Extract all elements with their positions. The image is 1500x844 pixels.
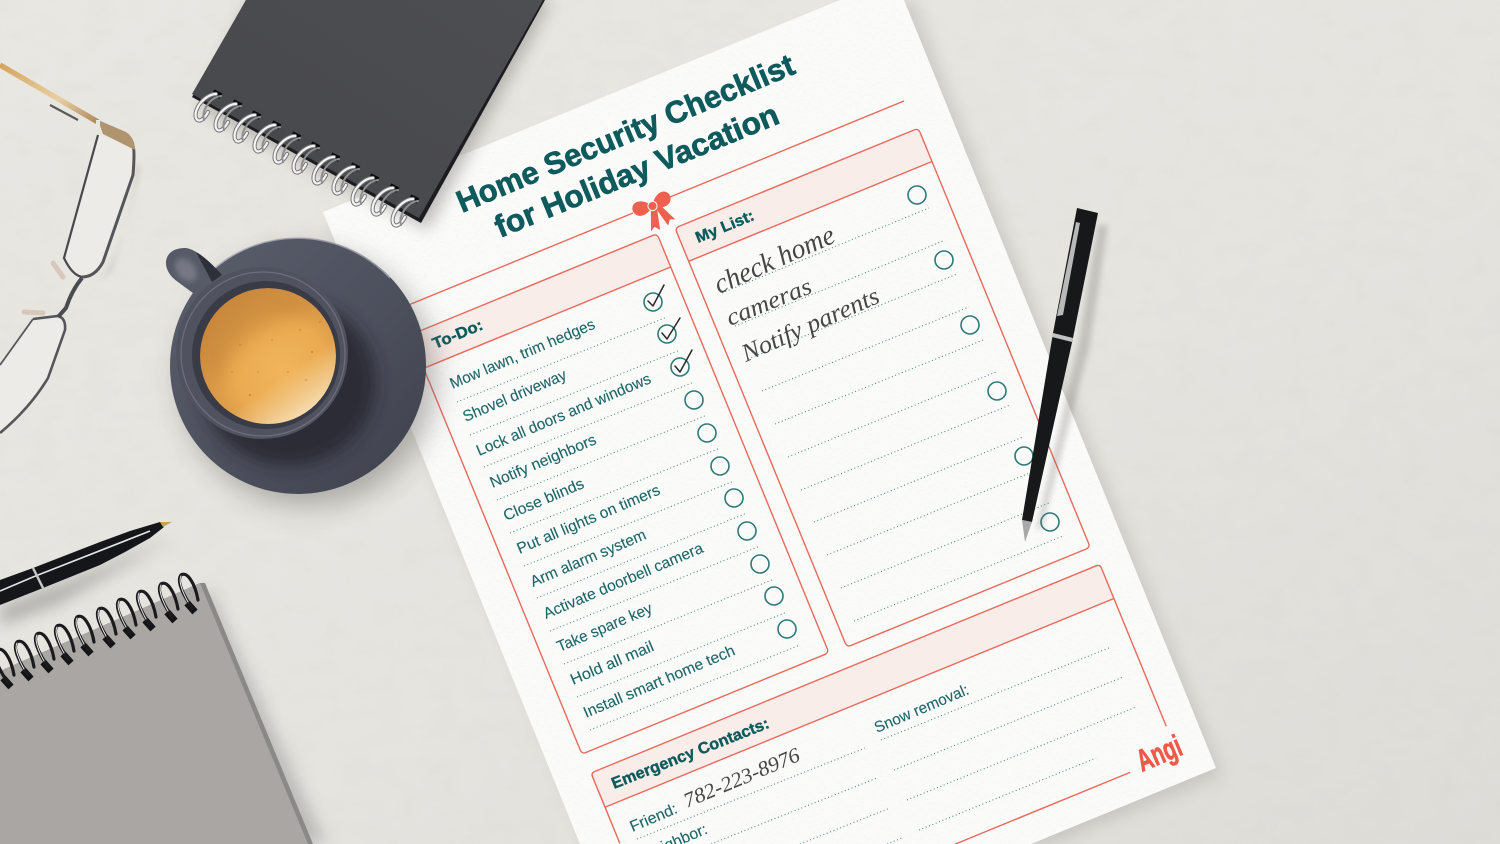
checklist items: Mow lawn, trim hedges: [447, 316, 598, 393]
handwritten entries: cameras: [723, 274, 816, 332]
title: for Holiday Vacation: [489, 97, 784, 244]
handwritten entries: check home: [709, 220, 840, 300]
handwritten entries: Notify parents: [737, 283, 884, 368]
handwritten entries: [709, 220, 884, 368]
checklist items: Notify neighbors: [487, 431, 599, 492]
contact labels: Snow removal:: [872, 682, 972, 737]
pen: bottom left: [0, 522, 176, 624]
checklist items: Take spare key: [554, 600, 655, 656]
checklist items: Activate doorbell camera: [541, 540, 706, 623]
checklist items: [447, 316, 738, 722]
notebook: grey, bottom left: [0, 574, 325, 844]
contact labels: [627, 682, 972, 844]
panel: My List: [675, 128, 1090, 647]
checklist items: Hold all mail: [568, 638, 656, 689]
checklist items: Put all lights on timers: [514, 482, 663, 558]
dotted rules: My List: [722, 208, 1063, 621]
checklist items: Install smart home tech: [581, 642, 738, 722]
pen: black, on paper: [1022, 208, 1108, 542]
notebook: dark, top: [192, 0, 552, 230]
heading: To-Do: To-Do:: [430, 317, 486, 353]
spiral binding holes: dark notebook: [213, 92, 418, 201]
spiral binding coils: grey notebook: [0, 574, 198, 683]
heading: Emergency Contacts: Emergency Contacts:: [609, 715, 772, 793]
icon: red bow: [630, 189, 681, 237]
lower lens: [0, 316, 65, 433]
coffee cup and saucer: [166, 238, 436, 506]
bridge: [58, 278, 82, 317]
title: Home Security Checklist: [451, 47, 800, 219]
paper sheet: [323, 0, 1222, 844]
upper lens: [64, 135, 134, 277]
hand-drawn check marks: [648, 285, 692, 372]
spiral binding coils: dark notebook: [196, 94, 418, 225]
glasses: [0, 65, 140, 433]
panel: To-Do: [410, 234, 829, 754]
panel: Emergency Contacts: [591, 564, 1177, 844]
cup handle: [166, 248, 222, 302]
checklist items: Close blinds: [501, 475, 587, 525]
logo: Angi: Angi: [1131, 728, 1187, 778]
saucer: [170, 238, 426, 494]
contact labels: Friend:: [627, 800, 680, 836]
spiral binding holes: grey notebook: [3, 603, 195, 687]
check circles: My List: [908, 186, 1059, 531]
checklist items: Shovel driveway: [460, 367, 569, 426]
checklist items: Arm alarm system: [528, 527, 649, 591]
cup rim: [176, 267, 348, 439]
heading: My List: My List:: [693, 207, 757, 247]
dotted rules: To-Do: [457, 317, 800, 730]
dotted rules: contacts: [637, 647, 1136, 844]
temple arm: [0, 65, 98, 122]
check circles: To-Do: [644, 293, 796, 638]
header rule with bow: [350, 101, 904, 329]
handwritten phone number: 782-223-8976: [680, 742, 804, 813]
checklist items: Lock all doors and windows: [474, 370, 654, 460]
coffee crema: [200, 288, 336, 424]
nose pads: [24, 263, 63, 313]
